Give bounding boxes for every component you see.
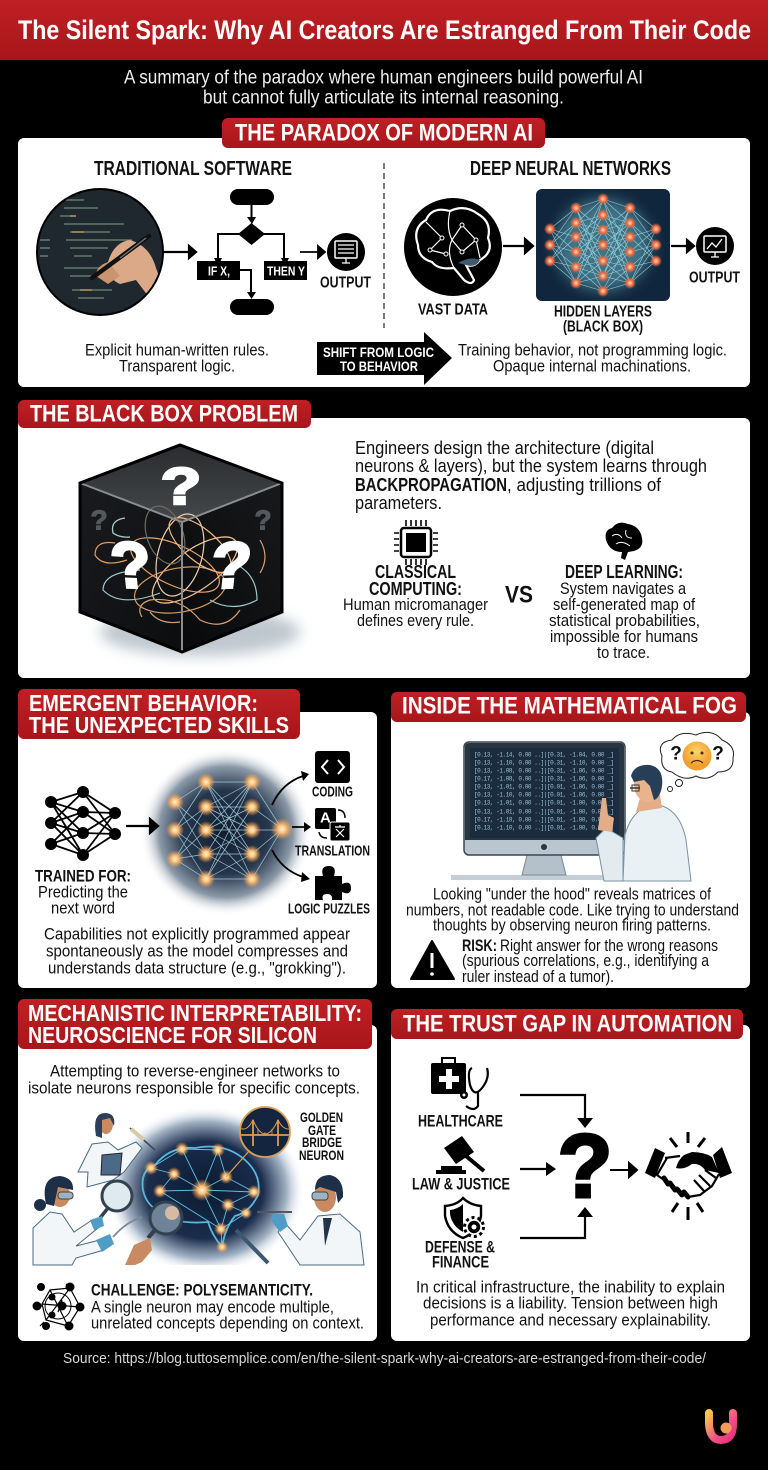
subtitle: [124, 68, 643, 108]
text block: risk: [462, 937, 718, 986]
flowchart: IF X,: [208, 264, 230, 278]
source line: Source: https://blog.tuttosemplice.com/en/the-silent-spark-why-ai-creators-are-estranged-from-their-code/: [63, 1351, 707, 1367]
icon: puzzle piece: LOGIC PUZZLES: [288, 900, 370, 918]
heading: deep neural networks: DEEP NEURAL NETWORKS: [470, 158, 671, 180]
illustration: monitor of matrices: [0.13, -1.01, 0.00 ..]|[0.01, -1.06, 0.00 _]: [474, 784, 614, 790]
subtitle: A summary of the paradox where human engineers build powerful AI: [124, 68, 643, 88]
icon: question mark: ?: [558, 1117, 612, 1217]
icon: healthcare: [418, 1058, 503, 1130]
arrow: data to hidden layers: [503, 239, 533, 253]
icon: translation: A: [320, 810, 331, 826]
chart: small trained network: [45, 786, 121, 861]
text block: under the hood: [406, 884, 739, 934]
illustration: black box cube: ?: [207, 529, 255, 603]
icon: healthcare: HEALTHCARE: [418, 1112, 503, 1130]
icon: polysemantic node cluster: [32, 1282, 84, 1330]
illustration: black box cube: ?: [107, 529, 155, 603]
arrow: shift from logic to behavior: TO BEHAVIOR: [340, 358, 418, 374]
text block: deep learning: to trace.: [597, 644, 650, 662]
text block: backpropagation: parameters.: [355, 493, 442, 513]
text block: risk: (spurious correlations, e.g., identifying a: [462, 952, 710, 970]
icon: thought bubble: ?: [670, 744, 682, 764]
text block: backpropagation: neurons & layers), but the system learns through: [355, 456, 707, 476]
icon: coding: CODING: [312, 784, 353, 800]
text block: backpropagation: BACKPROPAGATION: [355, 475, 507, 495]
text block: critical infrastructure: In critical infrastructure, the inability to explain: [416, 1278, 725, 1296]
text: trained for: Predicting the: [38, 882, 128, 902]
icon: translation: [295, 808, 370, 860]
chart: hidden layers neural network: (BLACK BOX): [563, 318, 643, 336]
illustration: monitor of matrices: [0.13, -1.14, 0.00 ..]|[0.31, -1.04, 0.00 _]: [474, 752, 614, 758]
caption: deep neural networks: Opaque internal machinations.: [493, 356, 691, 376]
heading: traditional software: TRADITIONAL SOFTWARE: [94, 158, 292, 180]
heading badge: emergent behavior: THE UNEXPECTED SKILLS: [29, 712, 289, 738]
text block: challenge polysemanticity: A single neuron may encode multiple,: [91, 1298, 334, 1316]
text block: under the hood: thoughts by observing neuron firing patterns.: [433, 916, 711, 934]
icon: brain with vast data: VAST DATA: [418, 302, 488, 318]
illustration: black box cube: ?: [254, 504, 272, 536]
arrow: flowchart to output: [300, 246, 325, 258]
text block: capabilities: Capabilities not explicitly programmed appear: [44, 924, 350, 944]
chart: emergent network glow: [140, 748, 312, 916]
arrows: to skills: [272, 771, 311, 882]
text: trained for: TRAINED FOR:: [35, 866, 131, 886]
flowchart: THEN Y: [267, 264, 305, 278]
illustration: monitor of matrices: [0.17, -1.08, 0.00 ..]|[0.31, -1.06, 0.00 _]: [474, 776, 614, 782]
icon: output monitor: [320, 233, 371, 292]
panel: inside the mathematical fog: [391, 692, 750, 988]
divider: [383, 163, 385, 328]
title banner: [0, 0, 768, 60]
arrow: hidden layers to output: [671, 240, 694, 252]
icon: brain: [606, 523, 642, 560]
heading badge: mechanistic interpretability: MECHANISTIC INTERPRETABILITY:: [28, 1000, 362, 1026]
text block: deep learning: statistical probabilities,: [549, 612, 700, 630]
panel: the paradox of modern AI: [18, 118, 750, 387]
illustration: black box cube: [80, 445, 300, 656]
text block: under the hood: Looking "under the hood" reveals matrices of: [433, 884, 711, 904]
icon: translation: TRANSLATION: [295, 842, 370, 860]
icon: chip: [394, 520, 438, 565]
icon: coding: [312, 751, 353, 800]
heading badge: emergent behavior: [18, 689, 300, 739]
icon: golden gate bridge neuron: GATE: [308, 1122, 336, 1138]
illustration: left scientist with magnifier: [33, 1176, 142, 1265]
heading badge: black box: THE BLACK BOX PROBLEM: [30, 400, 298, 428]
caption: deep neural networks: [458, 340, 727, 376]
icon: output monitor: OUTPUT: [320, 274, 371, 292]
text block: classical computing: COMPUTING:: [369, 579, 462, 599]
panel: the black box problem: [18, 400, 750, 678]
heading badge: mechanistic interpretability: [18, 999, 372, 1049]
text block: reverse engineer: isolate neurons responsible for specific concepts.: [28, 1078, 360, 1098]
icon: puzzle piece: [288, 866, 370, 918]
panel: the trust gap in automation: [391, 1009, 750, 1341]
heading badge: mechanistic interpretability: NEUROSCIENCE FOR SILICON: [28, 1022, 317, 1048]
illustration: monitor of matrices: [0.13, -1.10, 0.00 ..]|[0.01, -1.06, 0.00 _]: [474, 792, 614, 798]
text block: risk: ruler instead of a tumor).: [462, 968, 614, 986]
illustration: monitor of matrices: [0.13, -1.08, 0.00 ..]|[0.31, -1.06, 0.00 _]: [474, 768, 614, 774]
caption: traditional software: [85, 340, 269, 376]
icon: output chart monitor: [689, 227, 740, 286]
text block: deep learning: self-generated map of: [553, 596, 695, 614]
icon: handshake: [645, 1132, 732, 1220]
arrow: to emergent network: [126, 819, 158, 833]
text block: challenge polysemanticity: unrelated concepts depending on context.: [91, 1314, 364, 1332]
text block: backpropagation: , adjusting trillions of: [507, 475, 662, 495]
arrow: shift from logic to behavior: SHIFT FROM LOGIC: [323, 344, 434, 360]
text block: capabilities: spontaneously as the model compresses and: [46, 942, 348, 960]
caption: traditional software: Explicit human-written rules.: [85, 340, 269, 360]
text block: reverse engineer: Attempting to reverse-engineer networks to: [50, 1062, 340, 1080]
icon: defense shield: FINANCE: [432, 1252, 489, 1272]
icon: law gavel: [412, 1136, 510, 1194]
icon: defense shield: [425, 1198, 495, 1272]
logo: [709, 1413, 733, 1440]
arrow: code to flowchart: [163, 246, 196, 258]
flowchart: [197, 189, 307, 315]
text block: risk: RISK:: [462, 937, 497, 955]
panel: emergent behavior: [18, 689, 377, 988]
illustration: black box cube: ?: [90, 504, 108, 536]
chart: hidden layers neural network: [536, 189, 670, 336]
text block: reverse engineer: [28, 1062, 360, 1098]
text block: classical computing: CLASSICAL: [375, 562, 456, 582]
icon: output chart monitor: OUTPUT: [689, 270, 740, 286]
arrows: sectors to question mark: [520, 1095, 593, 1238]
caption: deep neural networks: Training behavior, not programming logic.: [458, 340, 727, 360]
illustration: monitor of matrices: [451, 742, 691, 880]
illustration: second magnifier and hand: [125, 1202, 182, 1265]
text block: deep learning: [549, 562, 700, 662]
illustration: monitor of matrices: [0.13, -1.01, 0.00 ..]|[0.01, -1.00, 0.00 _]: [474, 808, 614, 816]
text block: deep learning: System navigates a: [560, 580, 687, 598]
icon: warning triangle: [411, 941, 454, 979]
text block: critical infrastructure: performance and necessary explainability.: [430, 1310, 711, 1330]
icon: law gavel: LAW & JUSTICE: [412, 1174, 510, 1194]
icon: golden gate bridge neuron: GOLDEN: [300, 1109, 343, 1125]
subtitle: but cannot fully articulate its internal reasoning.: [203, 88, 564, 108]
icon: thought bubble: ?: [712, 744, 724, 764]
illustration: right scientist with probe: [236, 1175, 364, 1265]
chart: hidden layers neural network: HIDDEN LAYERS: [554, 304, 652, 320]
text block: backpropagation: Engineers design the architecture (digital: [355, 438, 654, 458]
illustration: monitor of matrices: [0.13, -1.01, 0.00 ..]|[0.01, -1.00, 0.00 _]: [474, 800, 614, 806]
arrow: shift from logic to behavior: [317, 332, 452, 385]
illustration: glowing brain network: [114, 1110, 300, 1265]
illustration: scientist pointing at screen: [596, 765, 691, 881]
text block: deep learning: DEEP LEARNING:: [565, 562, 683, 582]
illustration: black box cube: ?: [161, 457, 201, 515]
text block: capabilities: understands data structure (e.g., "grokking").: [48, 958, 346, 978]
text: trained for: [35, 866, 131, 918]
text block: backpropagation: [355, 438, 707, 513]
text block: classical computing: [343, 562, 488, 630]
text block: critical infrastructure: decisions is a liability. Tension between high: [423, 1294, 718, 1312]
text block: classical computing: defines every rule.: [357, 612, 474, 630]
icon: brain with vast data: [404, 198, 502, 318]
icon: thought bubble: [660, 732, 734, 792]
heading badge: the paradox: THE PARADOX OF MODERN AI: [235, 120, 533, 146]
text: trained for: next word: [51, 898, 115, 918]
icon: golden gate bridge neuron: NEURON: [299, 1147, 344, 1163]
text block: deep learning: impossible for humans: [550, 628, 698, 646]
illustration: top scientist: [78, 1113, 155, 1187]
text block: capabilities: [44, 924, 350, 978]
text block: challenge polysemanticity: CHALLENGE: POLYSEMANTICITY.: [91, 1280, 313, 1300]
illustration: hand writing code: [36, 188, 164, 316]
heading badge: emergent behavior: EMERGENT BEHAVIOR:: [29, 690, 258, 716]
text block: classical computing: Human micromanager: [343, 596, 488, 614]
illustration: monitor of matrices: [0.17, -1.18, 0.00 ..]|[0.01, -1.00, 0.00 _]: [474, 816, 614, 824]
icon: defense shield: DEFENSE &: [425, 1238, 495, 1256]
panel: mechanistic interpretability: [18, 999, 377, 1341]
icon: golden gate bridge neuron: [240, 1107, 344, 1163]
illustration: monitor of matrices: [0.13, -1.10, 0.00 ..]|[0.01, -1.00, 0.00 _]: [474, 824, 614, 832]
illustration: monitor of matrices: [0.13, -1.10, 0.00 ..]|[0.31, -1.10, 0.00 _]: [474, 760, 614, 766]
text block: risk: Right answer for the wrong reasons: [500, 937, 718, 955]
text block: critical infrastructure: [416, 1278, 725, 1330]
arrow: to handshake: [610, 1163, 637, 1177]
caption: traditional software: Transparent logic.: [119, 356, 235, 376]
label: versus: VS: [505, 582, 533, 608]
text block: challenge polysemanticity: [91, 1280, 364, 1332]
icon: golden gate bridge neuron: BRIDGE: [302, 1134, 342, 1150]
